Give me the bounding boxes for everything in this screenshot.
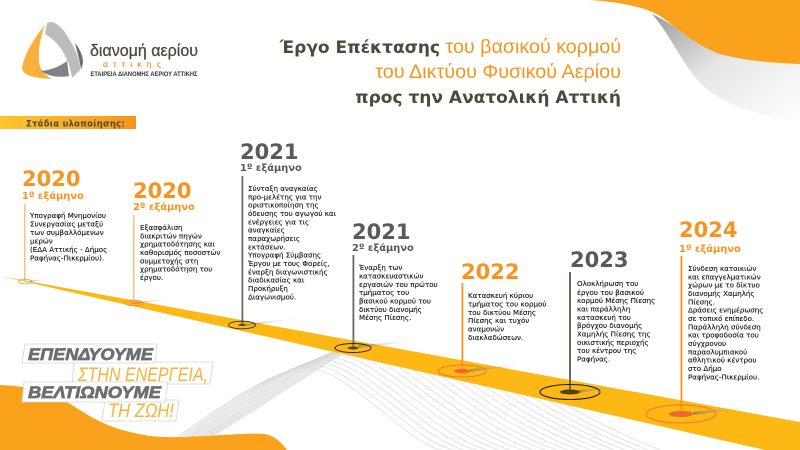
description: παραολυμπιακού	[688, 348, 747, 356]
description: μερών	[30, 236, 53, 246]
description: χώρων με το δίκτυο	[688, 280, 760, 290]
description: ενέργειες για τις	[248, 218, 309, 226]
heading: 2021	[352, 220, 410, 244]
description: (ΕΔΑ Αττικής - Δήμος	[30, 245, 107, 254]
description: χρηματοδότησης και	[140, 240, 216, 248]
heading: 2022	[461, 260, 519, 284]
milestone 2020 S1	[18, 167, 107, 284]
description: Συνεργασίας μεταξύ	[30, 220, 103, 228]
description: Παράλληλη σύνδεση	[688, 322, 761, 332]
description: αναγκαίες	[248, 226, 285, 234]
top-right grey wave	[652, 14, 800, 122]
description: Δράσεις ενημέρωσης	[688, 306, 763, 314]
description: συμμετοχής στη	[140, 256, 198, 266]
company subtitle: ΕΤΑΙΡΕΙΑ ΔΙΑΝΟΜΗΣ ΑΕΡΙΟΥ ΑΤΤΙΚΗΣ	[90, 72, 198, 78]
description: οριστικοποίηση της	[248, 200, 319, 210]
description: κατασκευαστικών	[359, 272, 423, 280]
description: Ραφήνας-Πικερμίου).	[30, 254, 104, 262]
subheading: 2º εξάμηνο	[133, 201, 195, 213]
description: και τροφοδοσία του	[688, 330, 759, 340]
description: όδευσης του αγωγού και	[248, 209, 337, 218]
description: διανομής Χαμηλής	[688, 289, 755, 298]
description: Πίεσης και τυχόν	[468, 316, 529, 325]
description: Έναρξη των	[358, 263, 402, 272]
description: παραχωρήσεις	[248, 234, 300, 243]
description: κορμού Μέσης Πίεσης	[577, 296, 655, 305]
description: εργασιών του πρώτου	[359, 280, 438, 289]
description: Κατασκευή κύριου	[468, 291, 533, 300]
milestone 2023	[540, 248, 655, 400]
description: έργου του βασικού	[577, 288, 644, 297]
description: καθορισμός ποσοστών	[140, 248, 220, 257]
heading: 2020	[22, 167, 80, 191]
description: στο Δήμο	[688, 364, 722, 373]
description: οικιστικής περιοχής	[577, 338, 649, 347]
description: του κέντρου της	[577, 346, 636, 355]
logo	[22, 22, 198, 79]
subheading: 1º εξάμηνο	[240, 162, 302, 174]
pin	[125, 215, 180, 306]
description: σύγχρονου	[688, 339, 726, 348]
description: βασικού κορμού του	[359, 296, 431, 306]
description: Σύνταξη αναγκαίας	[248, 184, 318, 193]
description: διακλαδώσεων.	[468, 333, 523, 342]
company name: διανομή αερίου	[90, 42, 198, 60]
description: τμήματος του κορμού	[468, 300, 546, 308]
top-right orange wave	[590, 0, 800, 64]
heading: 2020	[133, 179, 191, 203]
description: Μέσης Πίεσης.	[359, 313, 411, 322]
pin	[18, 204, 55, 284]
subheading: 1º εξάμηνο	[22, 190, 84, 202]
description: βρόγχου διανομής	[577, 321, 642, 330]
slogan line 1: ΕΠΕΝΔΥΟΥΜΕ	[28, 345, 154, 364]
grey line fan	[177, 352, 660, 450]
subheading: 1º εξάμηνο	[679, 243, 741, 255]
description: Προκήρυξη	[248, 284, 288, 293]
pin	[646, 256, 770, 423]
description: εκτάσεων.	[248, 242, 285, 252]
milestone 2021 S1	[228, 140, 337, 329]
description: του δικτύου Μέσης	[468, 308, 536, 317]
description: χρηματοδότηση του	[140, 264, 212, 274]
description: διακριτών πηγών	[140, 232, 202, 240]
title line 1: Έργο Επέκτασης του βασικού κορμού	[279, 36, 621, 58]
stages label: Στάδια υλοποίησης:	[26, 118, 125, 128]
pin	[540, 272, 635, 400]
slogan	[22, 344, 213, 422]
company region: αττικης	[103, 59, 166, 69]
title line 3: προς την Ανατολική Αττική	[355, 88, 621, 108]
description: Χαμηλής Πίεσης της	[577, 330, 651, 338]
description: Ραφήνας.	[577, 354, 610, 364]
description: έναρξη διαγωνιστικής	[248, 268, 328, 276]
description: προ-μελέτης για την	[248, 192, 322, 202]
description: Ολοκλήρωση του	[577, 279, 638, 288]
description: Εξασφάλιση	[140, 223, 183, 232]
stages label	[0, 116, 136, 129]
pin	[438, 283, 535, 377]
pin	[228, 176, 312, 329]
description: των συμβαλλόμενων	[30, 228, 104, 237]
description: Έργου με τους Φορείς,	[247, 259, 330, 268]
heading: 2024	[679, 218, 737, 242]
description: κατασκευή του	[577, 313, 631, 322]
description: τμήματος του	[359, 288, 409, 297]
description: Πίεσης.	[688, 298, 715, 306]
description: και επαγγελματικών	[688, 272, 761, 282]
description: δικτύου διανομής	[359, 305, 422, 314]
description: διαδικασίας και	[248, 276, 305, 284]
description: Υπογραφή Σύμβασης	[247, 250, 321, 260]
slogan line 4: ΤΗ ΖΩΗ!	[108, 401, 175, 422]
milestone 2022	[438, 260, 546, 377]
icon: triangular logo mark	[22, 22, 83, 79]
heading: 2023	[570, 248, 628, 272]
description: αθλητικού κέντρου	[688, 356, 756, 364]
milestone 2024	[646, 218, 770, 423]
description: Διαγωνισμού.	[248, 292, 296, 302]
description: αναμονών	[468, 324, 504, 334]
description: σε τοπικό επίπεδο.	[688, 314, 754, 323]
title line 2: του Δικτύου Φυσικού Αερίου	[375, 61, 621, 83]
slogan line 2: ΣΤΗΝ ΕΝΕΡΓΕΙΑ,	[77, 365, 208, 386]
title	[279, 36, 621, 108]
heading: 2021	[240, 140, 298, 164]
bottom-left orange wave	[0, 385, 287, 450]
description: Ραφήνας-Πικερμίου.	[688, 372, 759, 382]
timeline road	[0, 276, 800, 450]
milestone 2021 S2	[335, 220, 438, 352]
slogan line 3: ΒΕΛΤΙΩΝΟΥΜΕ	[28, 383, 162, 402]
description: και παράλληλη	[577, 304, 630, 314]
description: Σύνδεση κατοικιών	[688, 264, 756, 273]
description: Υπογραφή Μνημονίου	[29, 211, 106, 220]
milestone 2020 S2	[125, 179, 220, 306]
subheading: 2º εξάμηνο	[352, 242, 414, 254]
description: έργου.	[140, 273, 163, 282]
pin	[335, 255, 425, 352]
